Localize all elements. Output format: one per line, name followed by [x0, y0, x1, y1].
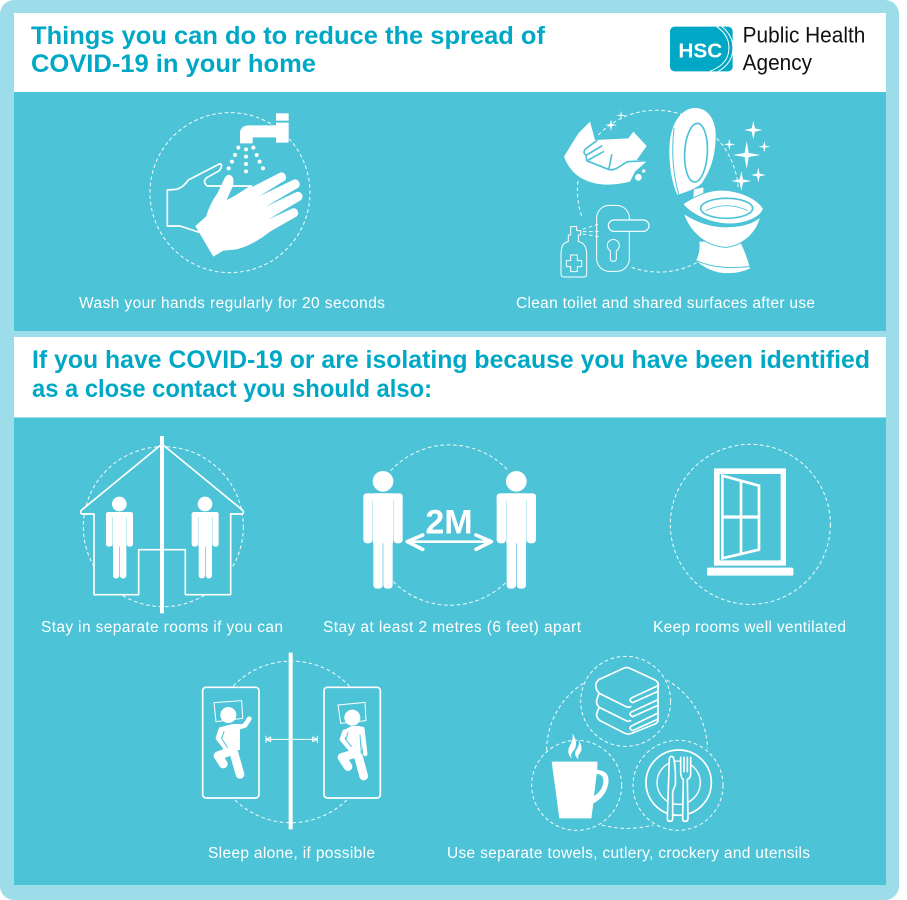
- heading: If you have COVID-19 or are isolating because you have been identified: [32, 346, 870, 374]
- logo: HSC Public Health Agency: Agency: [743, 50, 813, 75]
- icon: house with separate rooms: [80, 436, 243, 613]
- panel: subheading: [14, 337, 886, 417]
- icon: bed: [203, 687, 259, 798]
- caption: Wash your hands regularly for 20 seconds: [79, 295, 385, 312]
- icon: person: [192, 497, 219, 578]
- icon: person: [497, 471, 536, 589]
- icon: cloth and hand: [564, 122, 647, 185]
- icon: bed: [324, 687, 380, 798]
- logo: HSC Public Health Agency: HSC: [678, 39, 722, 62]
- icon: cleaning toilet and surfaces: [561, 108, 770, 277]
- icon: sparkles: [605, 110, 770, 191]
- caption: Keep rooms well ventilated: [653, 619, 846, 636]
- panel: header: [14, 13, 886, 92]
- heading: [32, 346, 870, 403]
- panel: if isolating: [14, 418, 886, 885]
- title: COVID-19 in your home: [31, 50, 316, 78]
- title: Things you can do to reduce the spread of: [31, 22, 546, 50]
- icon: washing hands under tap: [150, 113, 310, 273]
- label: 2M: 2M: [425, 504, 473, 542]
- panel: everyone in the home: [14, 92, 886, 331]
- arrow: 2 metres: [407, 535, 491, 549]
- icon: door handle: [597, 205, 649, 271]
- icon: sanitiser bottle: [561, 224, 599, 277]
- title: [31, 22, 546, 78]
- arrow: distance: [266, 736, 317, 743]
- icon: mug: [532, 733, 622, 830]
- caption: Stay at least 2 metres (6 feet) apart: [323, 619, 582, 636]
- icon: person: [363, 471, 403, 589]
- icon: towels, mug and cutlery: [532, 656, 723, 830]
- icon: two people 2 metres apart: [363, 445, 536, 605]
- icon: toilet: [669, 108, 763, 273]
- icon: open window: [670, 444, 830, 604]
- heading: as a close contact you should also:: [32, 375, 432, 403]
- logo: HSC Public Health Agency: [670, 23, 865, 75]
- icon: towels: [581, 656, 671, 746]
- caption: Sleep alone, if possible: [208, 845, 375, 862]
- caption: Clean toilet and shared surfaces after use: [516, 295, 815, 312]
- icon: plate and cutlery: [633, 740, 723, 830]
- icon: person: [106, 497, 133, 578]
- caption: Use separate towels, cutlery, crockery and utensils: [447, 845, 810, 862]
- caption: Stay in separate rooms if you can: [41, 619, 283, 636]
- logo: HSC Public Health Agency: Public Health: [743, 23, 865, 48]
- icon: separate beds: [203, 653, 380, 829]
